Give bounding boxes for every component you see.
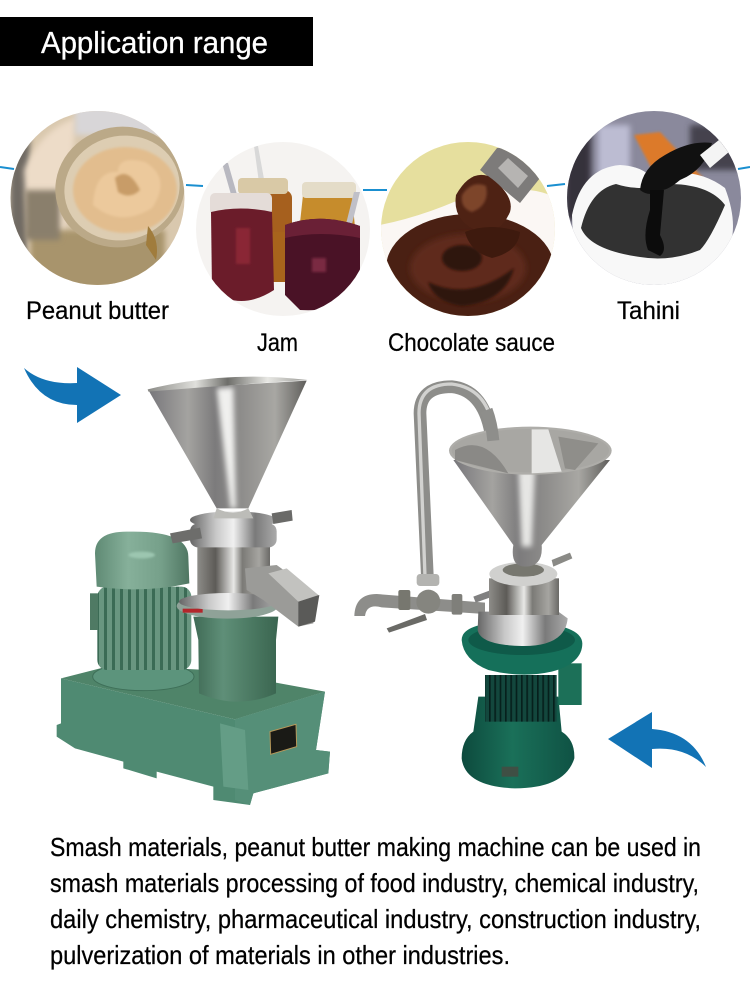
- photo: chocolate sauce: [380, 141, 558, 322]
- photo: tahini: [567, 111, 741, 285]
- outlet chute: [245, 565, 319, 627]
- machine: vertical colloid mill: [354, 384, 612, 788]
- label: Jam: Jam: [257, 329, 298, 357]
- arrow: pointing right to machine: [24, 367, 121, 423]
- label: Tahini: Tahini: [617, 297, 680, 325]
- return pipe: [420, 387, 492, 583]
- motor base: [462, 663, 582, 788]
- pipe highlight: [419, 384, 492, 577]
- photo: jam jars: [195, 141, 371, 317]
- green flange: [462, 622, 582, 675]
- label: Chocolate sauce: Chocolate sauce: [388, 329, 555, 357]
- machine base: [57, 665, 330, 805]
- hopper: [148, 377, 308, 518]
- hopper: [449, 427, 612, 567]
- title bar: [0, 17, 313, 66]
- grinder column: [177, 593, 278, 702]
- arrow: pointing left to machine: [608, 712, 706, 768]
- outlet valve assembly: [354, 574, 504, 633]
- steel housing: [170, 510, 293, 610]
- connector lines: [0, 167, 750, 190]
- title bar: Application range: [41, 25, 268, 60]
- machine: horizontal colloid mill: [57, 377, 330, 805]
- nameplate: [270, 724, 297, 754]
- label: Peanut butter: Peanut butter: [26, 297, 169, 325]
- description text: daily chemistry, pharmaceutical industry, construction industry,: [50, 904, 701, 934]
- pipe spout into hopper: [487, 410, 493, 441]
- photo: peanut butter jar: [10, 111, 184, 285]
- description text: [50, 832, 701, 970]
- description text: pulverization of materials in other industries.: [50, 940, 510, 970]
- motor: [90, 532, 194, 691]
- steel body: [478, 553, 572, 646]
